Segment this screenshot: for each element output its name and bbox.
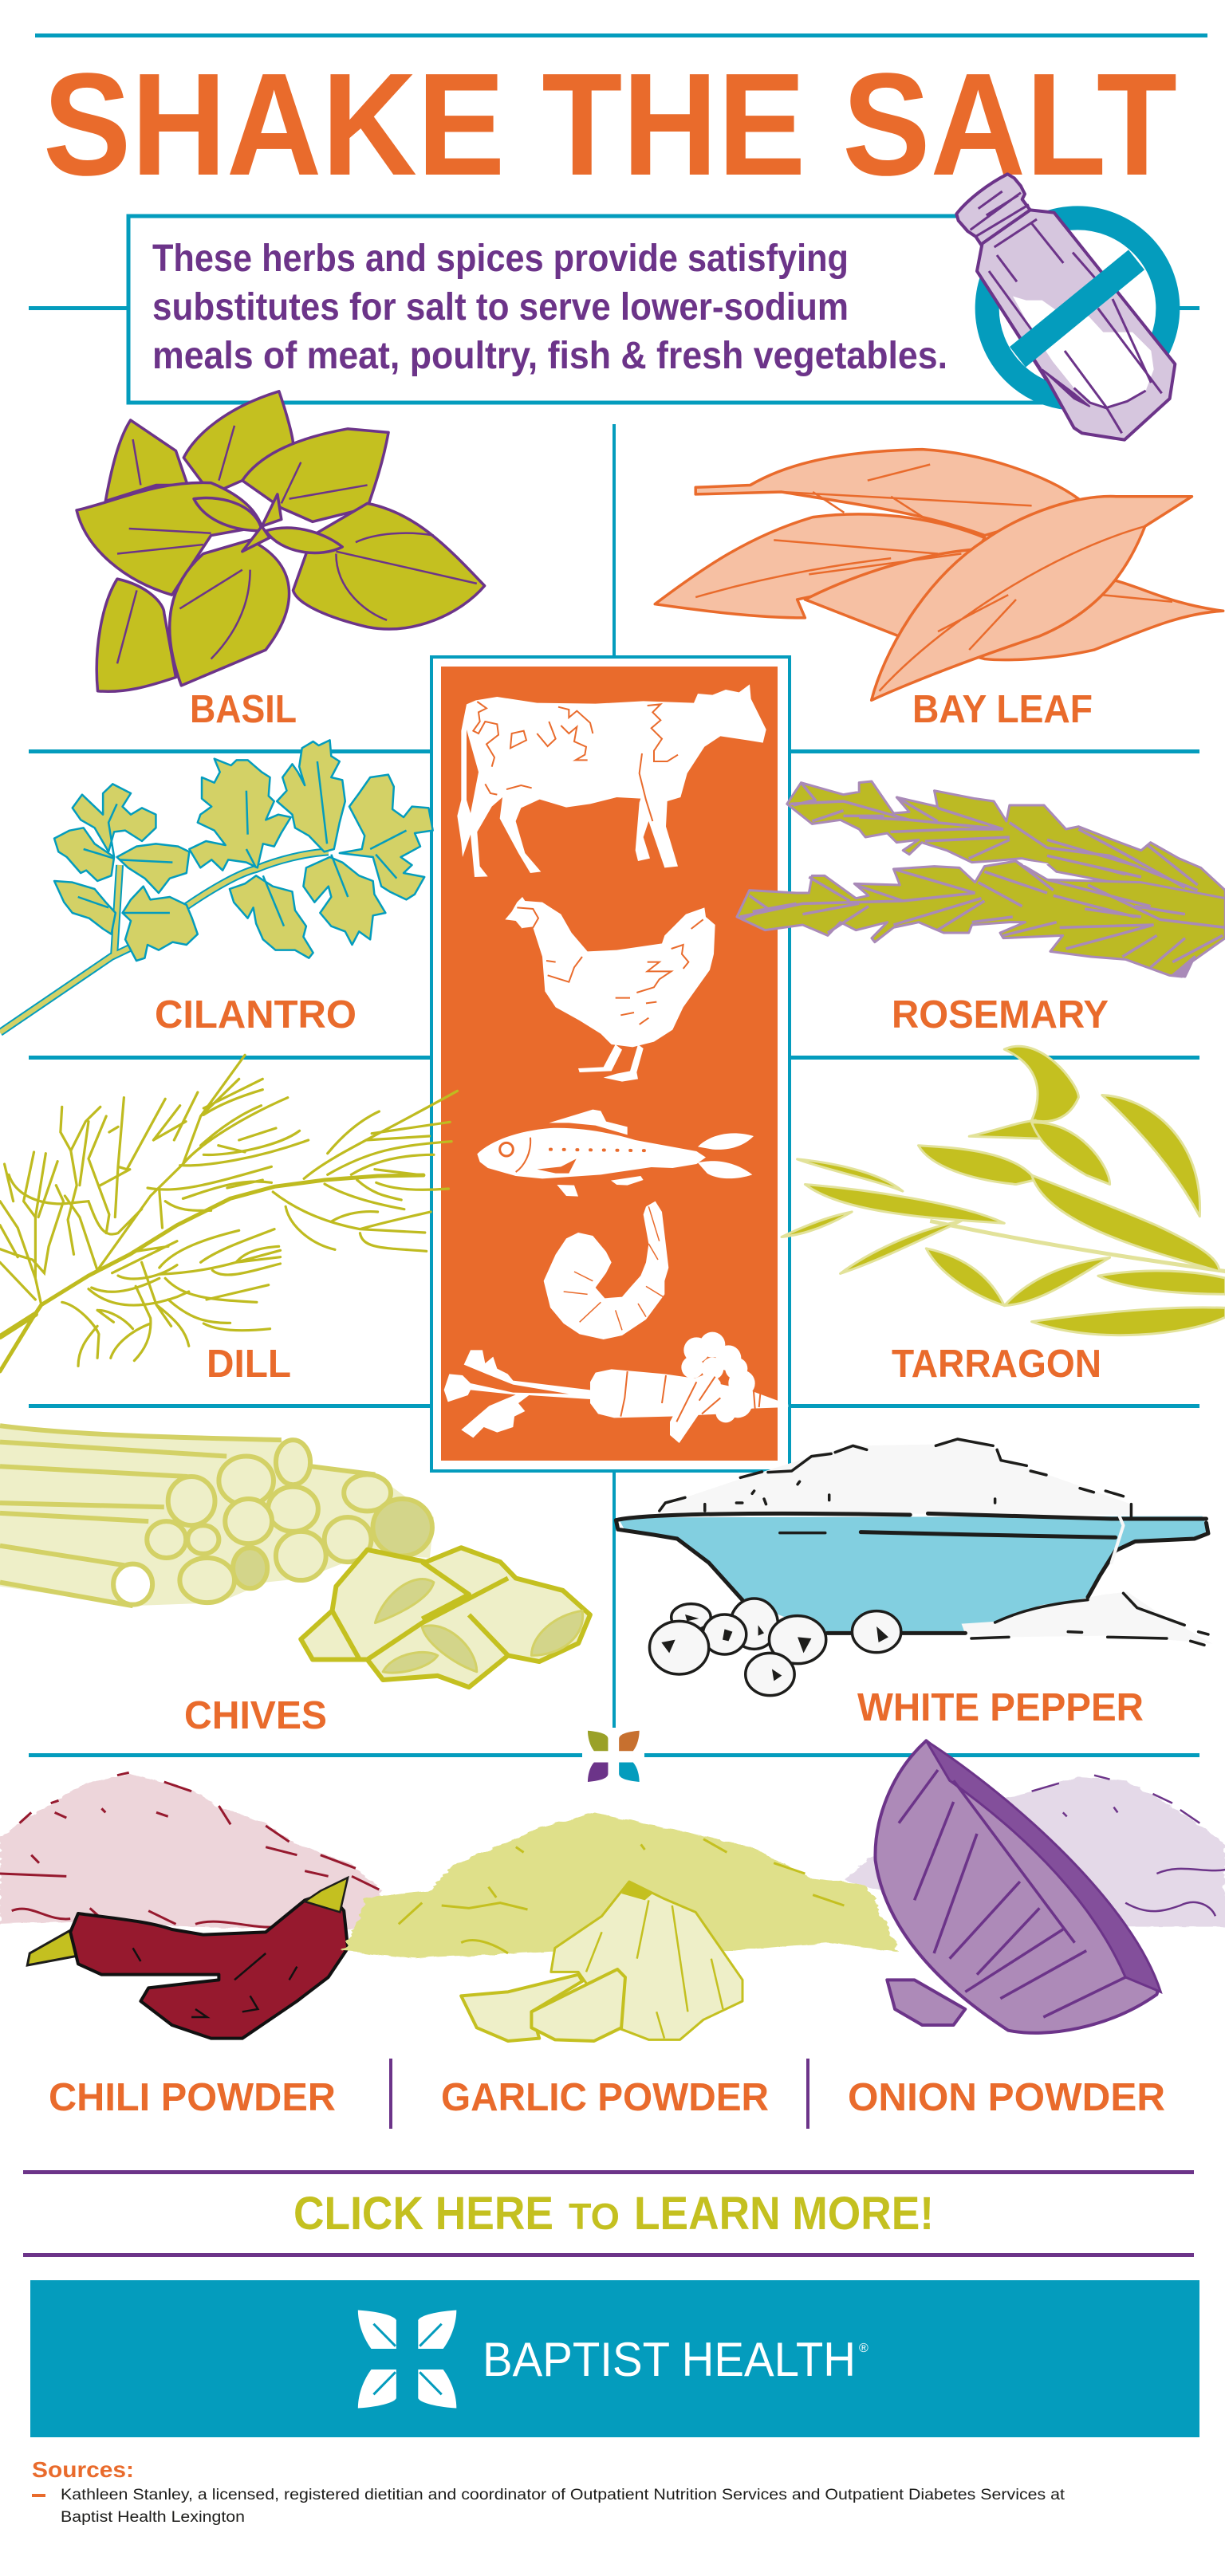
sources: Kathleen Stanley, a licensed, registered dietitian and coordinator of Outpatient Nutrition Services and Outpatient Diabetes Services at [61,2487,1065,2503]
label: tarragon: TARRAGON [892,1343,1101,1386]
footer banner: Baptist Health: BAPTIST HEALTH [483,2333,856,2386]
sources: Sources: [32,2457,134,2482]
icon: cilantro [0,740,433,1032]
footer banner: Baptist Health: ® [859,2342,869,2355]
footer banner: Baptist Health [30,2280,1199,2437]
call to action: CLICK HERE [293,2188,553,2240]
label: bay leaf: BAY LEAF [912,688,1093,731]
icon: fish [477,1110,754,1197]
icon: chili powder and pepper [0,1772,383,2039]
label: rosemary: ROSEMARY [892,993,1109,1036]
label: onion powder: ONION POWDER [848,2076,1165,2119]
icon: white pepper [616,1439,1212,1696]
icon: vegetables [444,1332,788,1443]
intro text [152,238,947,377]
intro text box [128,216,1085,403]
divider [389,2059,392,2129]
panel: foods [431,657,790,1471]
divider [806,2059,809,2129]
icon: basil [77,391,485,691]
call to action: TO [569,2196,620,2237]
icon: hen [505,897,715,1082]
icon: chives [0,1426,590,1687]
label: chives: CHIVES [184,1694,327,1737]
icon: rosemary [737,781,1225,977]
call to action [23,2170,1194,2257]
icon: bay leaf [655,450,1223,700]
intro text: substitutes for salt to serve lower-sodium [152,286,849,328]
label: garlic powder: GARLIC POWDER [441,2076,769,2119]
sources [32,2457,1065,2526]
icon: cow [457,684,766,877]
call to action: LEARN MORE! [634,2188,934,2240]
icon: small colour logo [588,1731,640,1782]
icon: salt shaker with no symbol [956,174,1175,440]
sources: Baptist Health Lexington [61,2509,245,2526]
icon: tarragon [782,1046,1225,1335]
intro text: meals of meat, poultry, fish & fresh vegetables. [152,335,947,377]
label: cilantro: CILANTRO [155,993,356,1036]
icon: onion powder and onion [844,1740,1225,2033]
icon: dill [0,1055,458,1371]
intro text: These herbs and spices provide satisfying [152,238,849,280]
icon: shrimp [544,1201,668,1339]
label: white pepper: WHITE PEPPER [857,1686,1144,1729]
icon: garlic powder and bulb [344,1812,899,2041]
icon: Baptist Health logo [358,2310,456,2409]
label: basil: BASIL [190,688,297,731]
label: chili powder: CHILI POWDER [49,2076,336,2119]
label: dill: DILL [207,1343,291,1386]
